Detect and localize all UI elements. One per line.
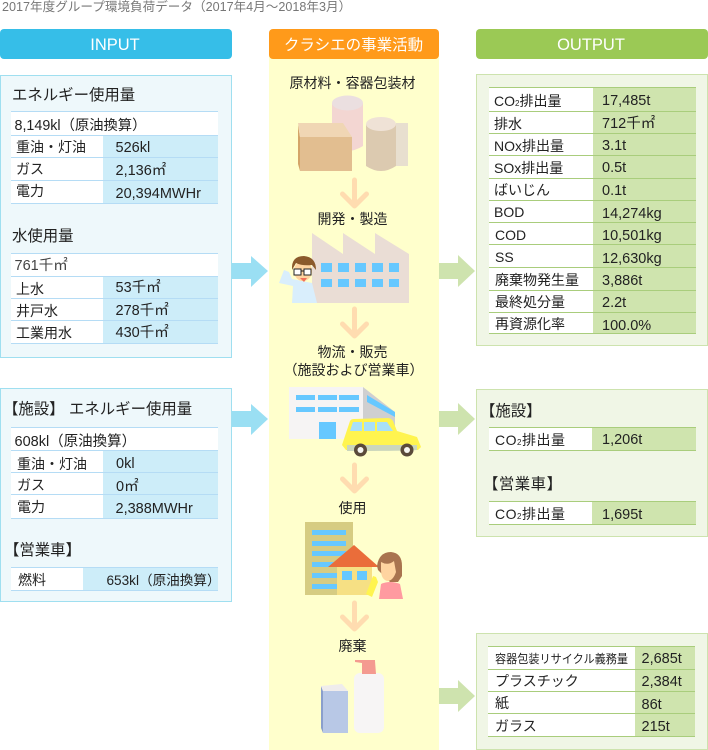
heading: water use: 水使用量 (12, 227, 74, 245)
row: gas (16, 161, 167, 179)
row: waste generated (495, 272, 642, 289)
row: wastewater: 712千㎡ (602, 115, 656, 132)
arrow: manufacturing to distribution (342, 309, 366, 336)
row: industrial water: 工業用水 (16, 325, 72, 341)
row: gas (17, 477, 139, 495)
row: glass: 215t (642, 719, 670, 735)
icon: materials (298, 96, 408, 171)
row: recycling rate (495, 316, 651, 334)
row: vehicle CO2: 1,695t (602, 507, 642, 523)
row: COD: COD (495, 227, 526, 243)
row: recycling rate: 100.0% (602, 318, 651, 334)
panel: output emissions (476, 74, 708, 346)
row: CO2: CO2排出量 (494, 93, 561, 109)
row: paper: 紙 (495, 695, 509, 711)
label: use: 使用 (338, 500, 366, 516)
row: plastic: 2,384t (642, 674, 682, 690)
arrow: output lower (439, 680, 475, 712)
arrow: materials to manufacturing (342, 180, 366, 206)
row: wastewater: 排水 (494, 116, 522, 132)
row: electricity: 2,388MWHr (116, 501, 193, 517)
arrow: distribution to use (342, 465, 366, 491)
row: electricity: 20,394MWHr (116, 186, 201, 202)
row: heavy oil and kerosene: 重油・灯油 (17, 456, 87, 472)
row: final disposal: 2.2t (602, 295, 626, 311)
panel: input energy and water (0, 76, 232, 358)
label: distribution and sales: 物流・販売 (318, 344, 388, 360)
panel: output facilities and vehicles (476, 390, 708, 536)
row: industrial water: 430千㎡ (116, 324, 169, 341)
column header: OUTPUT: OUTPUT (557, 36, 625, 54)
heading: facilities: 【施設】 (480, 402, 542, 420)
row: SOx (494, 160, 626, 176)
facility energy total: 608kl（原油換算） (14, 433, 136, 450)
panel: business activity column (269, 50, 439, 750)
row: SS: 12,630kg (602, 251, 662, 267)
column header: business activities: クラシエの事業活動 (284, 36, 423, 54)
column header: business activities (269, 29, 439, 59)
label: development and manufacturing: 開発・製造 (318, 211, 388, 227)
column header: INPUT (0, 29, 232, 59)
row: heavy oil and kerosene: 526kl (116, 140, 150, 156)
row: glass: ガラス (495, 718, 537, 734)
row: electricity (16, 183, 201, 202)
row: heavy oil and kerosene: 重油・灯油 (16, 139, 86, 155)
label: raw materials: 原材料・容器包装材 (290, 75, 416, 91)
heading: facility energy use: 【施設】 (3, 401, 65, 418)
arrow: input lower (232, 404, 268, 435)
row: electricity: 電力 (16, 183, 44, 199)
row: waste generated: 廃棄物発生量 (495, 272, 579, 288)
row: CO2: 17,485t (602, 93, 650, 109)
row: COD (495, 227, 662, 244)
row: COD: 10,501kg (602, 228, 662, 244)
row: industrial water (16, 324, 169, 341)
column header: OUTPUT (476, 29, 708, 59)
arrow: output middle (439, 403, 475, 435)
label: disposal: 廃棄 (338, 638, 366, 654)
row: electricity (17, 499, 193, 517)
row: paper (495, 695, 662, 713)
row: heavy oil and kerosene: 0kl (116, 456, 135, 472)
row: BOD: BOD (494, 204, 524, 220)
row: gas: ガス (17, 477, 45, 493)
row: plastic (495, 673, 682, 690)
panel: input facilities and vehicles (0, 388, 232, 602)
arrow: input upper (232, 256, 268, 287)
row: NOx (494, 138, 626, 154)
row: glass (495, 718, 670, 735)
row: SOx: SOx排出量 (494, 160, 563, 176)
row: BOD: 14,274kg (602, 206, 662, 222)
row: waste generated: 3,886t (602, 273, 642, 289)
row: heavy oil and kerosene (17, 456, 135, 472)
row: facility CO2: 1,206t (602, 432, 642, 448)
row: fuel (18, 572, 221, 588)
row: facility CO2 (495, 432, 642, 448)
heading: sales vehicles: 【営業車】 (483, 475, 562, 493)
panel: output packaging recycling (476, 634, 708, 750)
title: 2017年度グループ環境負荷データ（2017年4月～2018年3月） (2, 0, 351, 14)
row: tap water: 53千㎡ (116, 279, 161, 296)
icon: building and car (289, 387, 421, 456)
icon: factory and worker (279, 233, 409, 303)
row: gas: 0㎡ (116, 478, 139, 495)
row: dust: 0.1t (602, 183, 626, 199)
row: CO2 (494, 93, 650, 109)
heading: sales vehicles: 【営業車】 (4, 541, 81, 559)
row: NOx: 3.1t (602, 138, 626, 154)
label: distribution and sales (284, 344, 424, 378)
row: dust (494, 182, 626, 199)
row: tap water (16, 279, 161, 297)
row: plastic: プラスチック (495, 673, 579, 689)
row: well water: 278千㎡ (116, 302, 169, 319)
heading: energy use: エネルギー使用量 (12, 86, 135, 104)
arrow: use to disposal (342, 603, 366, 629)
row: fuel: 653kl（原油換算） (106, 573, 221, 588)
row: gas: 2,136㎡ (116, 162, 167, 179)
row: recycling obligation (495, 651, 682, 667)
row: recycling obligation: 容器包装リサイクル義務量 (495, 651, 628, 666)
arrow: output upper (439, 255, 475, 287)
row: gas: ガス (16, 161, 44, 177)
label: distribution and sales: （施設および営業車） (284, 362, 424, 378)
row: dust: ばいじん (494, 182, 550, 198)
row: well water (16, 302, 169, 319)
row: vehicle CO2: CO2排出量 (495, 506, 565, 522)
row: recycling obligation: 2,685t (642, 651, 682, 667)
column header: INPUT: INPUT (90, 36, 140, 54)
row: tap water: 上水 (16, 281, 44, 297)
row: electricity: 電力 (17, 499, 45, 515)
row: paper: 86t (642, 697, 662, 713)
row: final disposal (495, 294, 626, 311)
row: SOx: 0.5t (602, 160, 626, 176)
row: fuel: 燃料 (18, 572, 46, 588)
icon: package and bottle (321, 660, 384, 733)
energy total: 8,149kl（原油換算） (14, 117, 146, 134)
row: heavy oil and kerosene (16, 139, 150, 156)
row: facility CO2: CO2排出量 (495, 432, 565, 448)
row: recycling rate: 再資源化率 (495, 316, 565, 332)
row: wastewater (494, 115, 656, 132)
row: SS (495, 249, 662, 267)
row: NOx: NOx排出量 (494, 138, 564, 154)
row: BOD (494, 204, 662, 222)
heading: facility energy use: エネルギー使用量 (69, 400, 192, 418)
row: vehicle CO2 (495, 506, 642, 523)
row: SS: SS (495, 249, 514, 265)
row: well water: 井戸水 (16, 303, 58, 319)
row: final disposal: 最終処分量 (495, 294, 565, 310)
icon: homes and woman (305, 522, 403, 599)
water total: 761千㎡ (14, 257, 68, 274)
